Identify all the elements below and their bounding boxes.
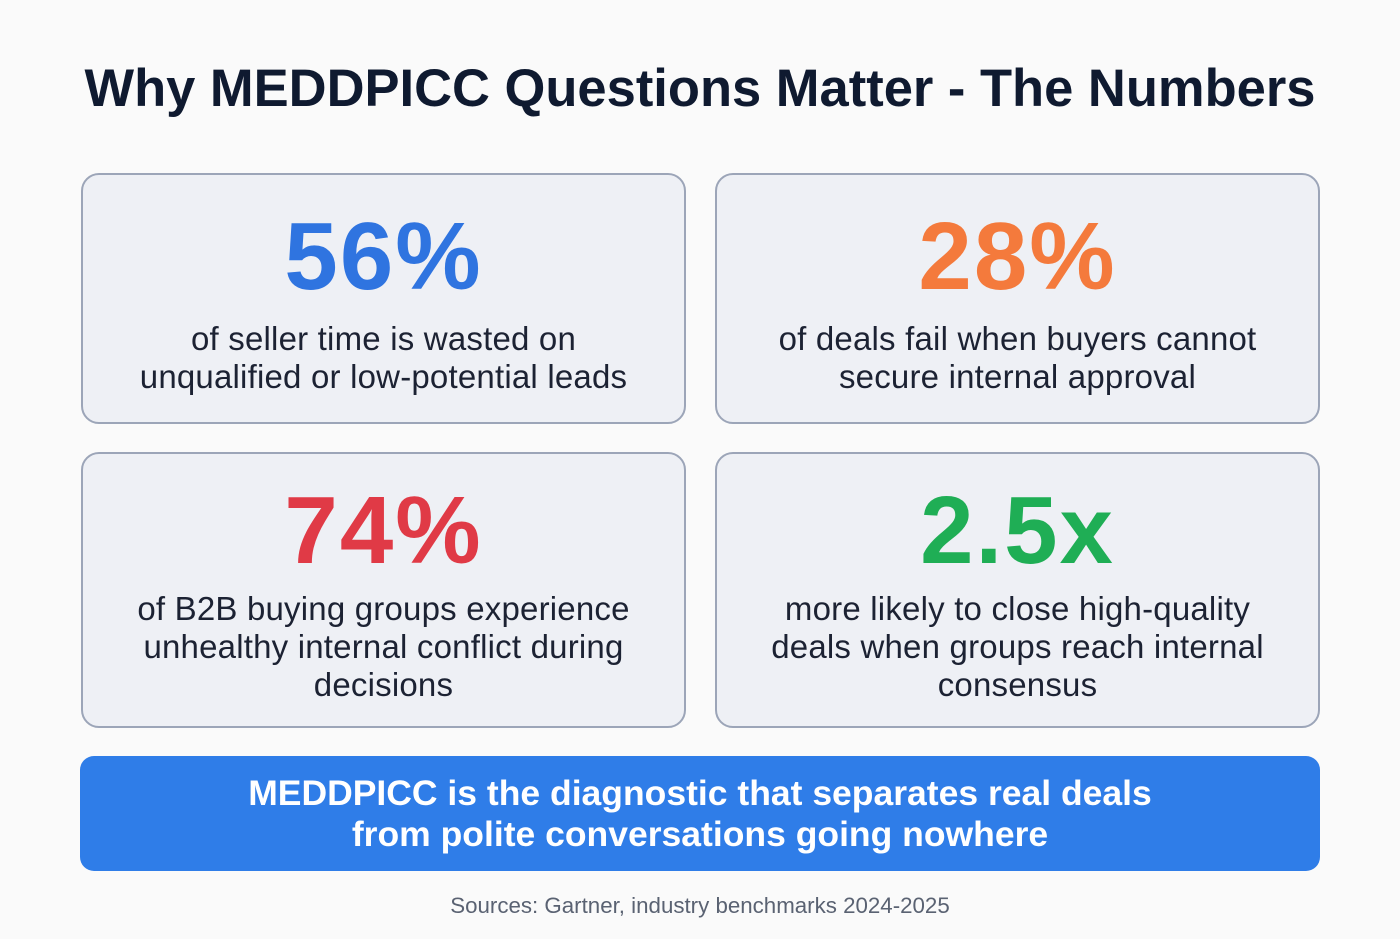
- description: [771, 590, 1264, 703]
- description: decisions: [314, 666, 453, 703]
- banner: from polite conversations going nowhere: [352, 814, 1048, 854]
- stat number: 2.5x: [920, 477, 1115, 584]
- panel: 74%: [81, 452, 686, 728]
- description: [140, 320, 627, 395]
- description: secure internal approval: [839, 358, 1196, 395]
- description: [779, 320, 1256, 395]
- banner: MEDDPICC is the diagnostic that separates real deals: [248, 773, 1152, 813]
- panel: 56%: [81, 173, 686, 424]
- description: of deals fail when buyers cannot: [779, 320, 1256, 357]
- stat number: 28%: [918, 203, 1117, 310]
- description: more likely to close high-quality: [785, 590, 1250, 627]
- description: unhealthy internal conflict during: [143, 628, 624, 665]
- stat number: 74%: [284, 477, 483, 584]
- sources: Sources: Gartner, industry benchmarks 2024-2025: [450, 893, 950, 918]
- description: [137, 590, 630, 703]
- description: of B2B buying groups experience: [137, 590, 630, 627]
- title: Why MEDDPICC Questions Matter - The Numbers: [85, 59, 1315, 118]
- description: consensus: [938, 666, 1097, 703]
- panel: 28%: [715, 173, 1320, 424]
- description: of seller time is wasted on: [191, 320, 576, 357]
- banner: [80, 756, 1320, 871]
- description: unqualified or low-potential leads: [140, 358, 627, 395]
- stat number: 56%: [284, 203, 483, 310]
- description: deals when groups reach internal: [771, 628, 1264, 665]
- panel: 2.5x: [715, 452, 1320, 728]
